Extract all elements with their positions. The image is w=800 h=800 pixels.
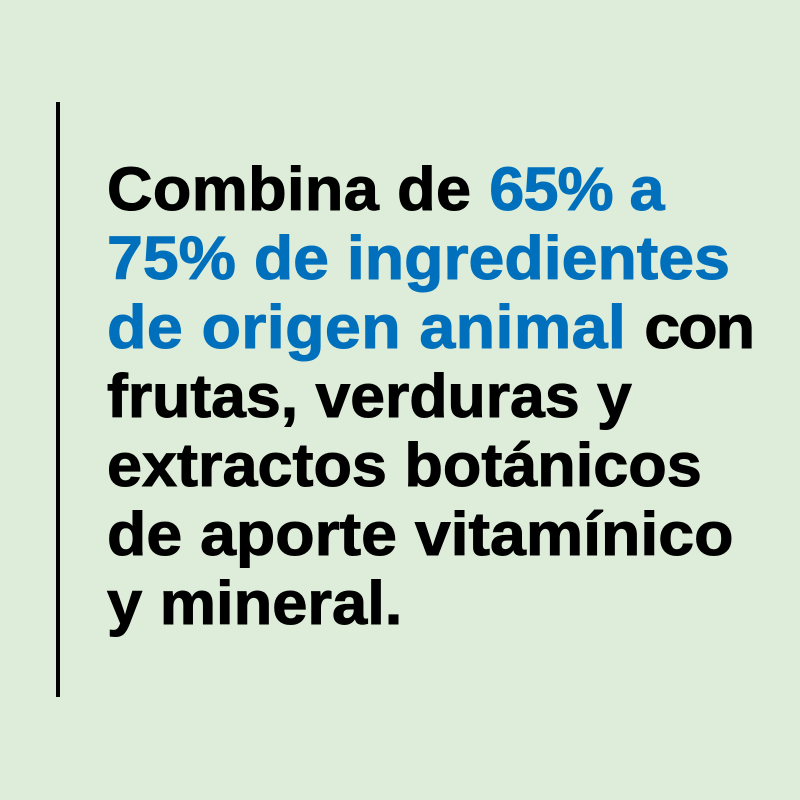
main text block: de origen animal con bbox=[107, 293, 753, 361]
main text block: Combina de 65% a bbox=[107, 155, 664, 223]
main text block: 75% de ingredientes bbox=[107, 224, 730, 292]
vertical rule bbox=[56, 102, 60, 697]
main text block: de aporte vitamínico bbox=[107, 500, 733, 568]
main text block: y mineral. bbox=[107, 569, 402, 637]
main text block: extractos botánicos bbox=[107, 431, 702, 499]
main text block bbox=[106, 155, 753, 637]
main text block: frutas, verduras y bbox=[107, 362, 632, 430]
